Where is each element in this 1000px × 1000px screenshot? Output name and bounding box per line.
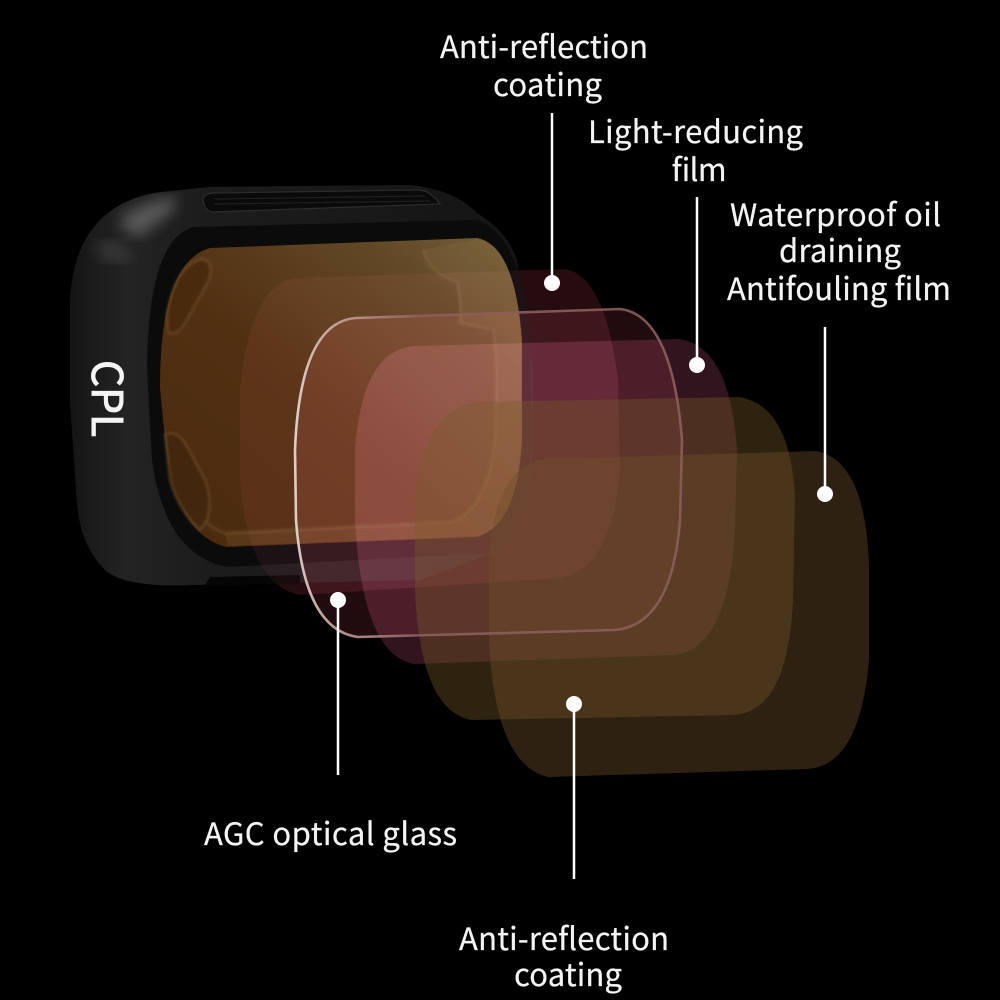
layer: back anti-reflection coating, behind body [240,269,620,595]
label: anti-reflection top: Anti-reflection [440,22,648,67]
label: waterproof: Waterproof oil [730,190,941,235]
layer: back anti-reflection coating, over body [240,269,620,595]
layer: waterproof antifouling film [415,397,795,720]
label: anti-reflection bottom: Anti-reflection [459,914,669,959]
label: anti-reflection top [440,22,648,105]
slot top-left [167,259,211,334]
label: light-reducing [588,107,804,190]
label: light-reducing: Light-reducing [588,107,804,152]
label: waterproof [727,190,951,309]
secondary shoulder highlight [92,240,134,262]
label: waterproof: draining [779,226,902,271]
label: AGC: AGC optical glass [204,809,457,854]
leader: anti-reflection bottom [566,696,582,879]
filter body [70,185,533,585]
leader: waterproof film [817,327,833,502]
lens inner band [175,250,496,533]
slot bottom-left [165,433,210,530]
body shell [70,185,533,585]
top grip [203,190,440,212]
label: waterproof: Antifouling film [727,264,951,309]
layer: light-reducing film [355,339,737,664]
lens right lighter rim [225,239,521,546]
front bezel [147,220,532,567]
label: anti-reflection bottom [459,914,669,995]
label: light-reducing: film [672,145,727,190]
highlight on shoulder [118,197,178,238]
layer: front anti-reflection film [489,451,869,777]
layer: AGC optical glass edge [295,309,682,637]
label: anti-reflection top: coating [493,60,603,105]
leader: light-reducing film [689,197,705,373]
layer: AGC optical glass fill [295,309,682,637]
label: anti-reflection bottom: coating [514,950,623,995]
bottom notch [205,575,300,585]
leader: AGC glass [330,592,346,775]
lens glass [160,238,522,547]
CPL label: CPL [79,360,140,437]
leader: anti-reflection top [544,113,560,291]
